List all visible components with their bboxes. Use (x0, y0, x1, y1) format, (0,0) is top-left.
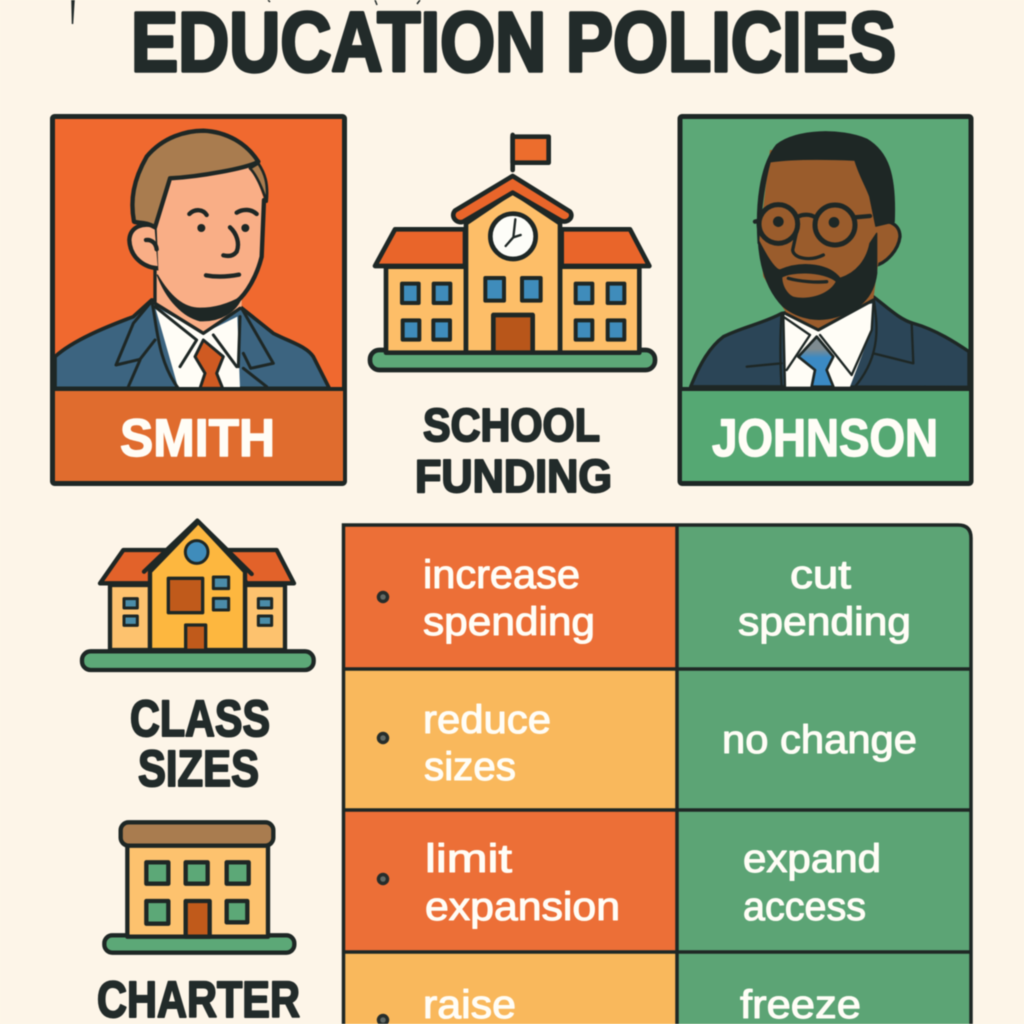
name: Smith: SMITH (120, 409, 275, 468)
heading: Class Sizes (130, 690, 270, 797)
icon: class sizes building (82, 521, 314, 670)
Smith row text: sizes (424, 745, 516, 789)
heading: School Funding: SCHOOL (423, 399, 600, 451)
Johnson row text: access (743, 885, 866, 929)
bullets (378, 592, 388, 1024)
column: Smith positions (342, 525, 677, 1024)
heading: Class Sizes: SIZES (138, 740, 259, 797)
heading: Class Sizes: CLASS (130, 690, 270, 747)
portrait: Johnson (691, 132, 969, 387)
Johnson row text: no change (722, 718, 917, 762)
column: Johnson positions (677, 525, 971, 1024)
table: policy comparison (342, 525, 971, 1024)
heading: School Funding: FUNDING (415, 450, 612, 502)
Johnson row text: cut (790, 553, 851, 597)
Smith row text: increase (423, 553, 580, 597)
heading: School Funding (415, 399, 612, 502)
portrait: Smith (55, 131, 329, 388)
Johnson row text (722, 553, 917, 1024)
panel: Smith (52, 116, 344, 484)
name: Johnson: JOHNSON (712, 409, 938, 468)
Smith row text: expansion (425, 885, 620, 929)
Smith row text: reduce (423, 698, 551, 742)
panel: Johnson (680, 116, 971, 484)
name band: Johnson (682, 391, 969, 481)
name band: Smith (55, 391, 343, 481)
Johnson row text: spending (738, 600, 911, 644)
table lines (343, 525, 971, 1024)
icon: charter school building (104, 822, 294, 953)
icon: school building (370, 135, 655, 370)
Johnson row text: expand (743, 837, 881, 881)
Smith row text: spending (423, 600, 595, 644)
Smith row text: limit (425, 837, 512, 881)
Smith row text (423, 553, 620, 1024)
